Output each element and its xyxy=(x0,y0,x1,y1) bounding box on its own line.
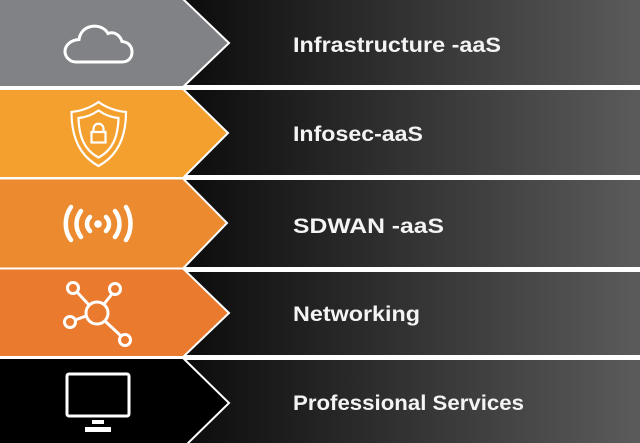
icon: monitor xyxy=(67,374,129,432)
row: SDWAN-aaS xyxy=(0,178,640,268)
arrow panel deep orange xyxy=(0,270,228,356)
arrow panel black xyxy=(0,359,228,443)
label: Infrastructure -aaS: Infrastructure -aaS xyxy=(293,33,501,57)
row: Infrastructure-aaS xyxy=(0,0,640,87)
label: SDWAN -aaS: SDWAN -aaS xyxy=(293,214,444,238)
dark bar 3 xyxy=(180,180,640,267)
icon: cloud xyxy=(65,26,132,62)
row: Professional Services xyxy=(0,358,640,443)
label: Infosec-aaS: Infosec-aaS xyxy=(293,122,423,146)
icon: network nodes xyxy=(64,282,130,346)
arrow panel orange xyxy=(0,180,226,268)
arrow panel amber xyxy=(0,90,227,177)
row: Infosec-aaS xyxy=(0,89,640,178)
dark bar 2 xyxy=(180,90,640,175)
icon: shield with lock xyxy=(72,102,126,166)
dark bar 4 xyxy=(180,272,640,355)
icon: wireless signal xyxy=(66,207,130,240)
label: Networking: Networking xyxy=(293,302,420,326)
dark bar 5 xyxy=(180,360,640,443)
row: Networking xyxy=(0,268,640,357)
arrow panel grey xyxy=(0,0,228,86)
label: Professional Services: Professional Services xyxy=(293,391,524,415)
dark bar 1 xyxy=(180,0,640,85)
